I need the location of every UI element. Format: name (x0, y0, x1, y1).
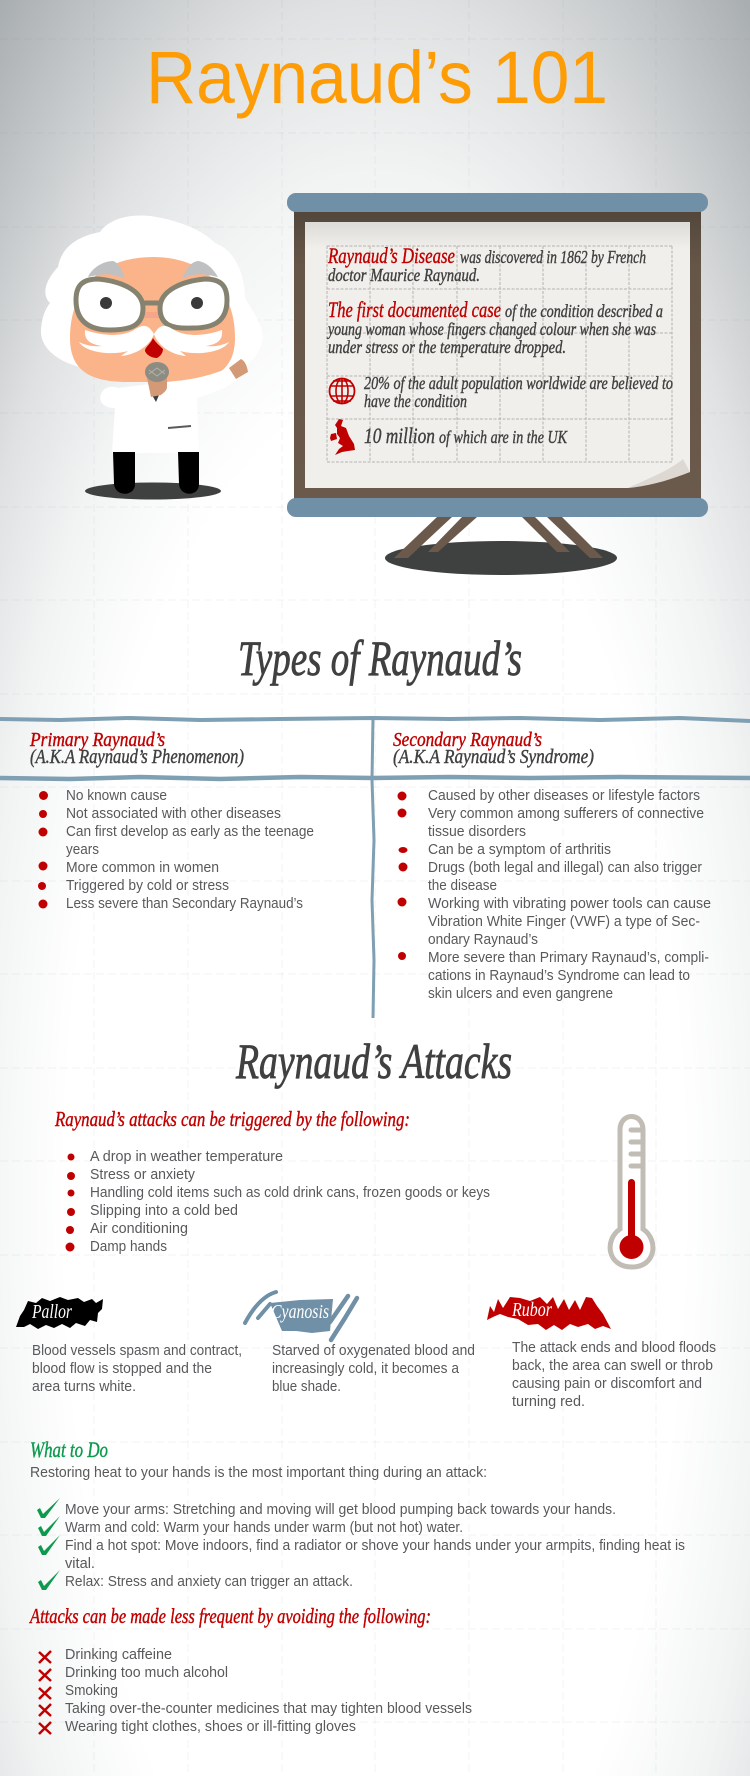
stat: 10 million: 10 million (364, 423, 435, 448)
heading: attacks: Raynaud’s Attacks (235, 1033, 512, 1089)
secondary list: Working with vibrating power tools can cause (428, 896, 711, 912)
label: Pallor (31, 1301, 72, 1323)
secondary list: More severe than Primary Raynaud’s, compli- (428, 950, 709, 966)
paper curl (628, 459, 690, 488)
pocket line (168, 426, 191, 428)
avoid list: Wearing tight clothes, shoes or ill-fitting gloves (65, 1719, 356, 1735)
description: back, the area can swell or throb (512, 1358, 713, 1374)
what to do list: Warm and cold: Warm your hands under warm (but not hot) water. (65, 1520, 463, 1536)
scientist character (41, 216, 263, 500)
brush: blue (245, 1292, 357, 1340)
stand legs (394, 517, 603, 558)
secondary heading (393, 729, 594, 768)
trigger list: Damp hands (90, 1239, 167, 1255)
primary list: Triggered by cold or stress (66, 878, 229, 894)
trigger list: Air conditioning (90, 1221, 188, 1237)
secondary heading: Secondary Raynaud’s (393, 729, 542, 751)
brush: red (487, 1297, 611, 1330)
lab coat (100, 366, 240, 453)
primary list: More common in women (66, 860, 219, 876)
table lines (0, 718, 750, 1018)
primary heading: Primary Raynaud’s (29, 729, 165, 751)
eyebrows (88, 261, 125, 279)
trigger list: Slipping into a cold bed (90, 1203, 238, 1219)
description: turning red. (512, 1394, 585, 1410)
secondary list: ondary Raynaud’s (428, 932, 538, 948)
secondary list: skin ulcers and even gangrene (428, 986, 613, 1002)
stat: 20 percent (364, 373, 673, 411)
primary list: Less severe than Secondary Raynaud’s (66, 896, 303, 912)
board text: discovery (327, 243, 646, 285)
panel: rubor (487, 1297, 716, 1410)
secondary list: the disease (428, 878, 497, 894)
description: increasingly cold, it becomes a (272, 1361, 460, 1377)
title: Raynaud’s 101 (146, 36, 608, 119)
what to do list: Find a hot spot: Move indoors, find a radiator or shove your hands under your armpits, finding heat is (65, 1538, 685, 1554)
presentation board (287, 193, 708, 575)
board text: first case: The first documented case (328, 297, 501, 322)
board text: first case (326, 297, 663, 357)
avoid list: Drinking too much alcohol (65, 1665, 228, 1681)
description: Blood vessels spasm and contract, (32, 1343, 242, 1359)
head (70, 257, 235, 382)
what to do list: Relax: Stress and anxiety can trigger an attack. (65, 1574, 353, 1590)
hair (41, 216, 263, 375)
eyes (100, 297, 112, 309)
secondary heading: (A.K.A Raynaud’s Syndrome) (393, 746, 594, 768)
primary list: years (66, 842, 99, 858)
board text: discovery: Raynaud’s Disease (327, 243, 455, 268)
description: Starved of oxygenated blood and (272, 1343, 475, 1359)
icons: cross marks (39, 1651, 51, 1734)
label: Rubor (511, 1299, 552, 1321)
secondary list: cations in Raynaud’s Syndrome can lead to (428, 968, 690, 984)
panel: primary (29, 729, 314, 912)
primary list: Can first develop as early as the teenage (66, 824, 314, 840)
secondary list: Drugs (both legal and illegal) can also trigger (428, 860, 702, 876)
description: area turns white. (32, 1379, 136, 1395)
frame (294, 208, 701, 502)
paper (305, 222, 690, 488)
secondary list: Vibration White Finger (VWF) a type of Sec- (428, 914, 700, 930)
board text: first case: under stress or the temperature dropped. (328, 337, 566, 357)
what to do heading: What to Do (30, 1437, 108, 1462)
avoid list (65, 1647, 472, 1735)
description: blood flow is stopped and the (32, 1361, 212, 1377)
stat: 20 percent: 20% of the adult population worldwide are believed to (364, 373, 673, 393)
glasses (76, 279, 227, 330)
trigger list: Stress or anxiety (90, 1167, 196, 1183)
stat: 20 percent: have the condition (364, 391, 467, 411)
board text: first case: of the condition described a (505, 301, 663, 321)
trigger heading: Raynaud’s attacks can be triggered by the following: (54, 1107, 410, 1131)
trigger list: A drop in weather temperature (90, 1149, 283, 1165)
secondary list: Can be a symptom of arthritis (428, 842, 611, 858)
mouth (145, 338, 163, 358)
legs (113, 452, 135, 494)
avoid list: Smoking (65, 1683, 118, 1699)
trigger list (90, 1149, 490, 1255)
primary list (66, 788, 314, 912)
board text: first case: young woman whose fingers changed colour when she was (326, 319, 656, 339)
primary bullets (38, 791, 48, 908)
icon: UK map (330, 419, 355, 455)
avoid list: Taking over-the-counter medicines that may tighten blood vessels (65, 1701, 472, 1717)
what to do list (65, 1502, 685, 1590)
stat: 10 million: of which are in the UK (439, 427, 568, 447)
secondary list: Caused by other diseases or lifestyle factors (428, 788, 700, 804)
secondary list: tissue disorders (428, 824, 526, 840)
icons: check marks (37, 1498, 60, 1590)
moustache (79, 326, 154, 356)
panel: secondary (393, 729, 711, 1002)
icon: thermometer (610, 1116, 653, 1267)
microphone (145, 362, 169, 402)
what to do list: Move your arms: Stretching and moving will get blood pumping back towards your hands. (65, 1502, 616, 1518)
secondary bullets (398, 792, 408, 960)
description: blue shade. (272, 1379, 341, 1395)
board text: discovery: was discovered in 1862 by French (460, 247, 646, 267)
label: Cyanosis (271, 1301, 329, 1323)
character shadow (85, 482, 221, 500)
top bar (287, 193, 708, 212)
avoid list: Drinking caffeine (65, 1647, 172, 1663)
trigger list: Handling cold items such as cold drink cans, frozen goods or keys (90, 1185, 490, 1201)
primary heading (29, 729, 244, 768)
board text: discovery: doctor Maurice Raynaud. (328, 265, 480, 285)
description: causing pain or discomfort and (512, 1376, 702, 1392)
primary list: Not associated with other diseases (66, 806, 281, 822)
brush: black (16, 1297, 103, 1329)
board shadow (385, 541, 617, 575)
panel: cyanosis (245, 1292, 475, 1395)
secondary list: Very common among sufferers of connective (428, 806, 704, 822)
description (272, 1343, 475, 1395)
what to do intro: Restoring heat to your hands is the most important thing during an attack: (30, 1465, 487, 1481)
raised hand (229, 359, 248, 379)
panel: pallor (16, 1297, 242, 1395)
primary list: No known cause (66, 788, 167, 804)
secondary list (428, 788, 711, 1002)
description (32, 1343, 242, 1395)
icon: globe (330, 378, 354, 404)
stat: 10 million (364, 423, 568, 448)
description (512, 1340, 716, 1410)
avoid heading: Attacks can be made less frequent by avoiding the following: (28, 1604, 431, 1628)
nose band (140, 312, 164, 318)
what to do list: vital. (65, 1556, 95, 1572)
bottom bar (287, 498, 708, 517)
heading: types: Types of Raynaud’s (238, 630, 522, 686)
description: The attack ends and blood floods (512, 1340, 716, 1356)
trigger bullets (66, 1154, 75, 1252)
primary heading: (A.K.A Raynaud’s Phenomenon) (30, 746, 244, 768)
